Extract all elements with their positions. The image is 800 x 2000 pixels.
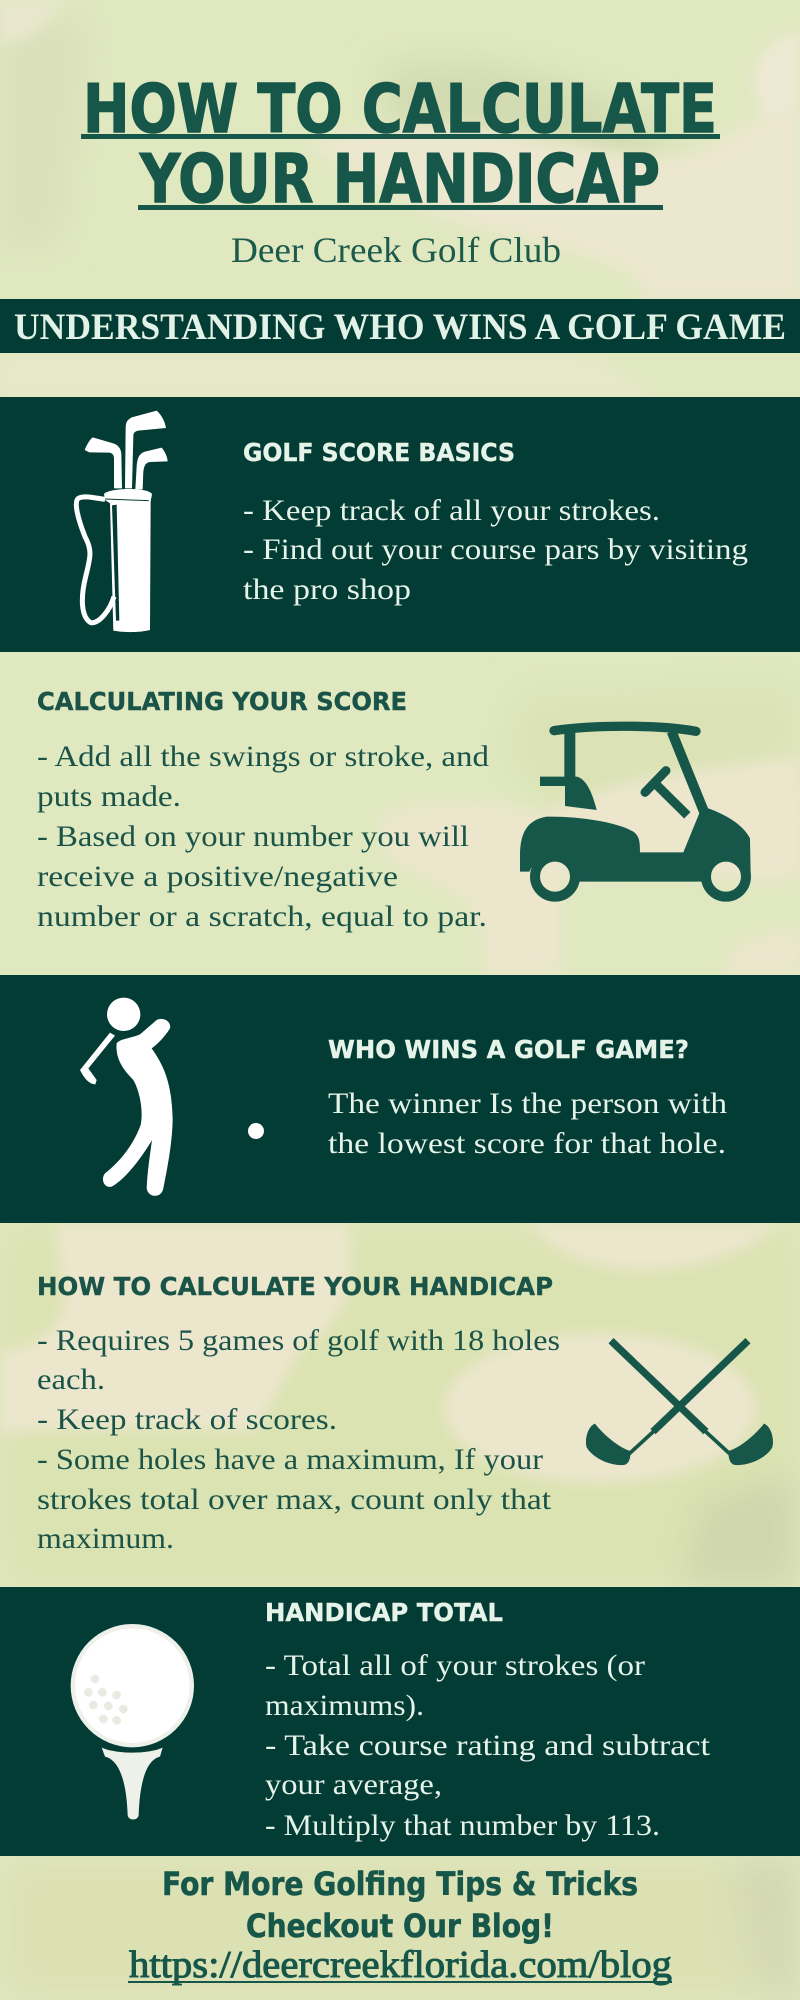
icon: golf cart	[520, 726, 751, 897]
text block: calculating score: - Based on your number you will	[37, 820, 469, 853]
icon: golf bag with clubs	[76, 411, 168, 632]
footer heading line 1: For More Golfing Tips & Tricks	[162, 1865, 638, 1903]
panel: who wins a golf game	[0, 975, 800, 1223]
subtitle: Deer Creek Golf Club	[231, 230, 561, 270]
text block: handicap steps: maximum.	[37, 1522, 174, 1555]
text block: handicap total	[265, 1649, 711, 1842]
heading: handicap total: HANDICAP TOTAL	[265, 1598, 503, 1627]
heading: golf score basics: GOLF SCORE BASICS	[243, 438, 515, 467]
text block: handicap total: - Take course rating and subtract	[265, 1729, 711, 1762]
text block: handicap steps: each.	[37, 1363, 105, 1396]
heading: calculating your score: CALCULATING YOUR SCORE	[37, 687, 407, 716]
panel: calculating your score	[37, 687, 751, 933]
panel: golf score basics	[0, 397, 800, 652]
title: YOUR HANDICAP	[139, 140, 660, 218]
banner: understanding who wins: UNDERSTANDING WHO WINS A GOLF GAME	[14, 307, 786, 348]
text block: who wins	[328, 1087, 727, 1160]
text block: handicap total: maximums).	[265, 1689, 424, 1722]
text block: who wins: the lowest score for that hole.	[328, 1127, 726, 1160]
text block: calculating score: puts made.	[37, 780, 181, 813]
text block: handicap steps: - Keep track of scores.	[37, 1403, 337, 1436]
icon: crossed golf clubs	[586, 1341, 773, 1465]
text block: score basics: - Keep track of all your strokes.	[243, 494, 660, 527]
text block: score basics: the pro shop	[243, 573, 411, 606]
icon: golfer swinging	[80, 998, 264, 1196]
text block: score basics: - Find out your course pars by visiting	[243, 533, 748, 566]
icon: golf ball on tee	[71, 1624, 194, 1819]
heading: how to calculate your handicap: HOW TO CALCULATE YOUR HANDICAP	[37, 1272, 553, 1301]
blog url: https://deercreekflorida.com/blog	[129, 1944, 672, 1986]
title	[81, 70, 720, 218]
text block: calculating score: receive a positive/negative	[37, 860, 398, 893]
text block: calculating score	[37, 740, 489, 933]
footer: blog call to action	[128, 1865, 672, 1986]
text block: score basics	[243, 494, 748, 606]
text block: handicap steps: - Requires 5 games of golf with 18 holes	[37, 1324, 560, 1357]
text block: handicap steps: - Some holes have a maximum, If your	[37, 1443, 543, 1476]
text block: handicap steps: strokes total over max, count only that	[37, 1483, 552, 1516]
heading: who wins a golf game: WHO WINS A GOLF GAME?	[328, 1035, 689, 1064]
text block: handicap total: - Total all of your strokes (or	[265, 1649, 645, 1682]
text block: handicap total: your average,	[265, 1768, 442, 1801]
footer heading line 2: Checkout Our Blog!	[246, 1907, 554, 1945]
text block: calculating score: number or a scratch, equal to par.	[37, 900, 487, 933]
panel: how to calculate your handicap	[37, 1272, 773, 1555]
panel: handicap total	[0, 1587, 800, 1856]
text block: who wins: The winner Is the person with	[328, 1087, 727, 1120]
text block: calculating score: - Add all the swings or stroke, and	[37, 740, 489, 773]
text block: handicap steps	[37, 1324, 560, 1555]
text block: handicap total: - Multiply that number by 113.	[265, 1809, 660, 1842]
